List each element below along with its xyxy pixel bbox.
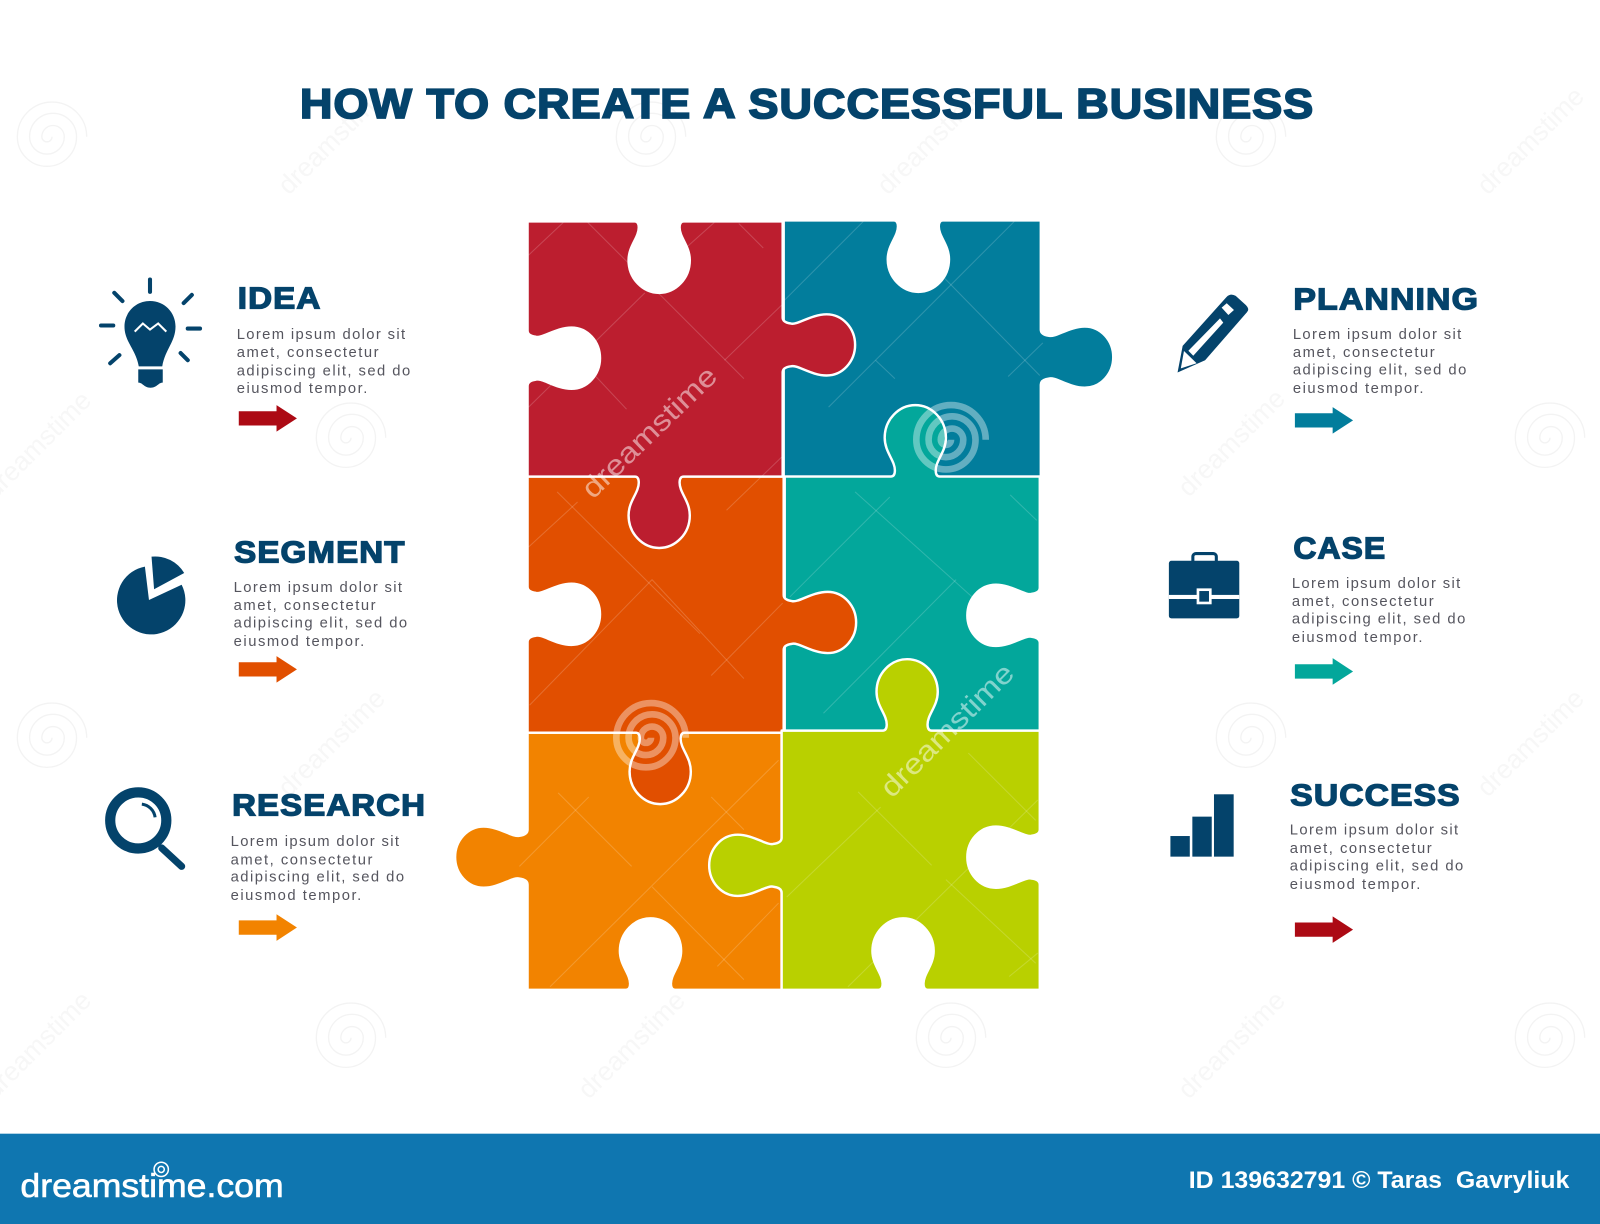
body text: Lorem ipsum dolor sit [1292, 576, 1460, 592]
puzzle piece: planning blue [784, 220, 1113, 477]
body text: amet, consectetur [234, 598, 376, 614]
body text: amet, consectetur [1290, 841, 1432, 857]
background watermark pattern: dreamstime [572, 985, 691, 1104]
arrow [239, 656, 297, 683]
body text: eiusmod tempor. [231, 888, 361, 904]
arrow [239, 405, 297, 432]
background watermark pattern: dreamstime [1172, 985, 1291, 1104]
puzzle watermark overlay: dreamstime [874, 657, 1021, 804]
puzzle piece: segment dark orange [528, 477, 856, 804]
heading: CASE [1293, 531, 1386, 565]
background watermark pattern: dreamstime [871, 81, 990, 200]
panel: research [110, 789, 426, 941]
icon: briefcase [1169, 554, 1239, 618]
puzzle watermark overlay: dreamstime [575, 360, 724, 505]
body text [231, 834, 404, 904]
icon: bar chart [1170, 794, 1234, 857]
heading: SUCCESS [1290, 778, 1461, 812]
body text: Lorem ipsum dolor sit [1290, 823, 1458, 839]
jigsaw puzzle [455, 220, 1113, 990]
icon: light bulb [101, 280, 200, 388]
heading: RESEARCH [232, 789, 426, 823]
puzzle piece: research orange [455, 733, 782, 990]
body text: amet, consectetur [237, 345, 379, 361]
icon: pie chart [117, 556, 185, 634]
body text: eiusmod tempor. [1293, 381, 1423, 397]
body text: adipiscing elit, sed do [1293, 363, 1466, 379]
body text: eiusmod tempor. [1290, 877, 1420, 893]
arrow [1295, 916, 1353, 943]
arrow [239, 914, 297, 941]
heading: PLANNING [1293, 282, 1479, 316]
icon: pencil [1178, 295, 1248, 372]
body text: Lorem ipsum dolor sit [234, 580, 402, 596]
background watermark pattern: dreamstime [1172, 383, 1291, 502]
body text: adipiscing elit, sed do [1292, 611, 1465, 627]
background watermark pattern: dreamstime [1471, 81, 1590, 200]
puzzle piece: idea red [528, 221, 855, 548]
body text [1290, 823, 1463, 893]
brand logo text: dreamstime.com [20, 1168, 284, 1205]
body text: Lorem ipsum dolor sit [231, 834, 399, 850]
body text: amet, consectetur [1292, 594, 1434, 610]
icon: magnifying glass [110, 792, 182, 866]
title: HOW TO CREATE A SUCCESSFUL BUSINESS [300, 80, 1314, 127]
heading: IDEA [238, 281, 321, 315]
background watermark pattern: dreamstime [1471, 683, 1590, 802]
footer banner [0, 1134, 1600, 1224]
background watermark pattern: dreamstime [272, 683, 391, 802]
arrow [1295, 407, 1353, 434]
body text: adipiscing elit, sed do [234, 616, 407, 632]
body text: eiusmod tempor. [234, 634, 364, 650]
body text [1292, 576, 1465, 646]
panel: success [1170, 778, 1463, 943]
body text [234, 580, 407, 650]
body text [1293, 327, 1466, 397]
body text: adipiscing elit, sed do [231, 870, 404, 886]
body text: adipiscing elit, sed do [237, 364, 410, 380]
background watermark pattern: dreamstime [272, 81, 391, 200]
panel: planning [1178, 282, 1479, 434]
panel: segment [117, 536, 407, 683]
panel: case [1169, 531, 1465, 685]
panel: idea [101, 280, 410, 432]
body text: Lorem ipsum dolor sit [1293, 327, 1461, 343]
puzzle piece: case teal [785, 405, 1040, 732]
body text: Lorem ipsum dolor sit [237, 327, 405, 343]
body text: eiusmod tempor. [1292, 630, 1422, 646]
heading: SEGMENT [234, 536, 406, 570]
puzzle watermark overlay [519, 221, 1043, 987]
body text: adipiscing elit, sed do [1290, 858, 1463, 874]
arrow [1295, 658, 1353, 685]
body text [237, 327, 410, 397]
body text: amet, consectetur [1293, 345, 1435, 361]
image id and credit: ID 139632791 © Taras Gavryliuk [1189, 1167, 1570, 1194]
body text: eiusmod tempor. [237, 381, 367, 397]
body text: amet, consectetur [231, 852, 373, 868]
puzzle piece: success lime [709, 659, 1040, 990]
